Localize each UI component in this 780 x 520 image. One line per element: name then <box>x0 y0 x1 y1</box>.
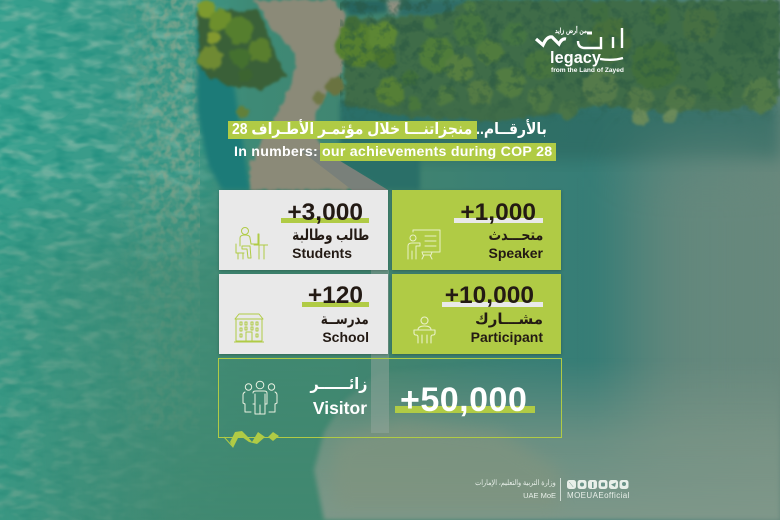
icon: school building <box>234 314 264 342</box>
bar: school number underline <box>302 302 369 307</box>
title: English headline <box>234 143 556 161</box>
label: visitor Arabic: زائــــــر <box>310 376 367 393</box>
icon: group of visitors <box>242 380 278 414</box>
panel: school <box>219 274 388 354</box>
footer: handle: MOEUAEofficial <box>567 491 630 500</box>
label: students English: Students <box>292 245 352 261</box>
label: visitor English: Visitor <box>313 398 367 418</box>
label: students Arabic: طالب وطالبة <box>292 227 369 244</box>
number: speaker: +1,000 <box>460 199 536 226</box>
footer: ministry and social handles <box>475 478 630 501</box>
logo: Arabic tagline: من أرض زايد <box>555 28 587 35</box>
number: visitor: +50,000 <box>400 381 527 419</box>
title: Arabic headline: بالأرقــام.. منجزاتنـــا خلال مؤتمـر الأطـراف 28 <box>232 121 547 138</box>
logo: tagline: from the Land of Zayed <box>551 67 624 74</box>
bar: participant number underline <box>442 302 543 307</box>
footer: ministry English name: UAE MoE <box>523 491 556 500</box>
title: English headline: our achievements during COP 28 <box>322 144 552 160</box>
number: students: +3,000 <box>287 199 363 226</box>
panel: visitor <box>218 358 562 438</box>
mangrove trees <box>197 0 780 125</box>
number: participant: +10,000 <box>445 282 534 309</box>
bar: visitor number underline <box>395 406 535 413</box>
bar: speaker number underline <box>454 218 543 223</box>
panel: students <box>219 190 388 270</box>
right lagoon haze and sandy shore <box>640 150 780 470</box>
icon: speaker at board <box>408 230 440 260</box>
icon: participant at podium <box>413 316 436 344</box>
panel: speaker <box>392 190 561 270</box>
label: school English: School <box>322 329 369 345</box>
label: speaker Arabic: متحـــدث <box>488 227 543 244</box>
bar: students number underline <box>281 218 369 223</box>
label: school Arabic: مدرســة <box>321 311 369 328</box>
logo: legacy from the Land of Zayed <box>535 26 624 74</box>
panel: participant <box>392 274 561 354</box>
label: participant Arabic: مشـــارك <box>475 311 543 328</box>
logo: wave mark and Arabic wordmark <box>535 28 624 61</box>
title: English headline: In numbers: <box>234 144 318 160</box>
logo: legacy wordmark: legacy <box>550 49 601 67</box>
rocky causeway <box>250 0 382 190</box>
icon: green ribbon wave <box>224 431 279 448</box>
icons: social media row <box>567 480 628 489</box>
icon: student at desk <box>236 227 268 260</box>
footer: ministry Arabic name: وزارة التربية والتعليم، الإمارات <box>475 478 556 487</box>
label: participant English: Participant <box>471 329 543 345</box>
number: school: +120 <box>308 282 363 309</box>
label: speaker English: Speaker <box>489 245 543 261</box>
